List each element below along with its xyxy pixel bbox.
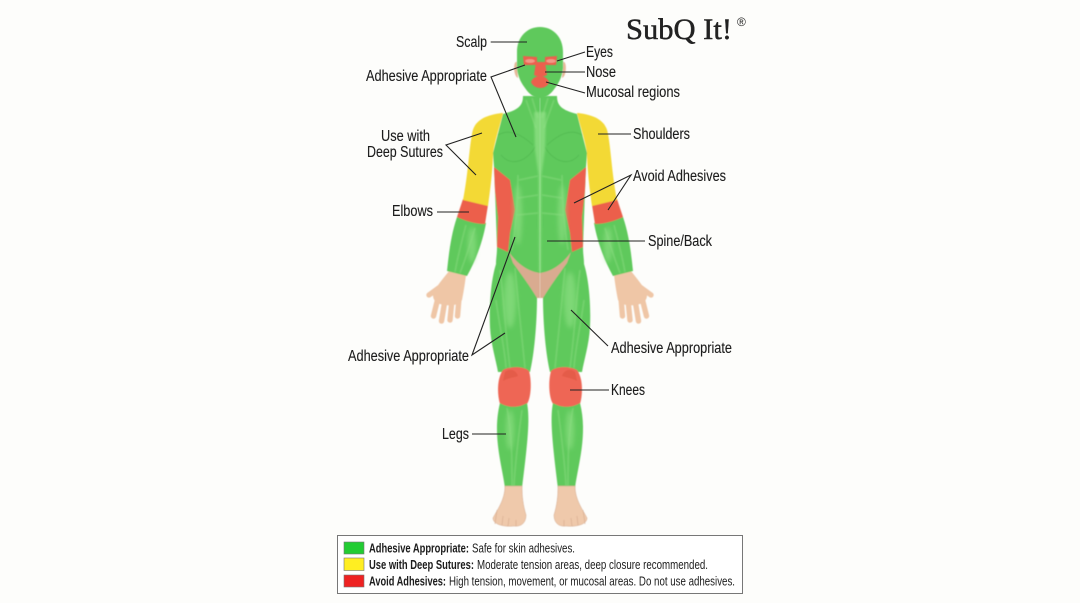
label: avoid adhesives: Avoid Adhesives [633, 168, 726, 185]
label: nose: Nose [586, 64, 616, 81]
legend: green text: Safe for skin adhesives. [472, 542, 575, 556]
label: spine/back: Spine/Back [648, 233, 713, 250]
label: shoulders: Shoulders [633, 126, 690, 143]
legend: red text [369, 574, 735, 588]
face: eyes [525, 59, 556, 63]
legend: green swatch [344, 542, 364, 554]
legend box [338, 536, 742, 594]
legend: red swatch [344, 575, 364, 587]
label: elbows: Elbows [392, 203, 433, 220]
label: use with deep sutures: Use with [381, 128, 430, 145]
body: right half [540, 62, 651, 526]
legend: yellow swatch [344, 558, 364, 570]
legend: green text [369, 542, 575, 556]
label: legs: Legs [442, 426, 469, 443]
label: use with deep sutures: Deep Sutures [367, 144, 443, 161]
label: adhesive appropriate (right leg): Adhesive Appropriate [611, 340, 732, 357]
leader lines [437, 42, 645, 434]
legend: yellow text: Use with Deep Sutures: [369, 558, 474, 572]
label: adhesive appropriate (head and chest): Adhesive Appropriate [366, 68, 487, 85]
legend: red text: Avoid Adhesives: [369, 574, 446, 588]
label: scalp: Scalp [456, 34, 487, 51]
sternum highlight [534, 112, 546, 272]
head [517, 27, 563, 98]
body: left half [429, 62, 540, 526]
label: mucosal regions: Mucosal regions [586, 84, 680, 101]
legend: yellow text: Moderate tension areas, deep closure recommended. [477, 558, 708, 572]
legend: green text: Adhesive Appropriate: [369, 542, 469, 556]
legend: red text: High tension, movement, or mucosal areas. Do not use adhesives. [449, 574, 735, 588]
logo: SubQ It! [626, 13, 732, 46]
label: use with deep sutures [367, 128, 443, 161]
legend [338, 536, 742, 594]
body diagram [429, 27, 651, 526]
face: red mucosal regions [523, 56, 557, 88]
label: adhesive appropriate (left leg): Adhesive Appropriate [348, 348, 469, 365]
label: eyes: Eyes [586, 44, 613, 61]
label: knees: Knees [611, 382, 645, 399]
legend: yellow text [369, 558, 708, 572]
logo: ® [737, 15, 746, 29]
